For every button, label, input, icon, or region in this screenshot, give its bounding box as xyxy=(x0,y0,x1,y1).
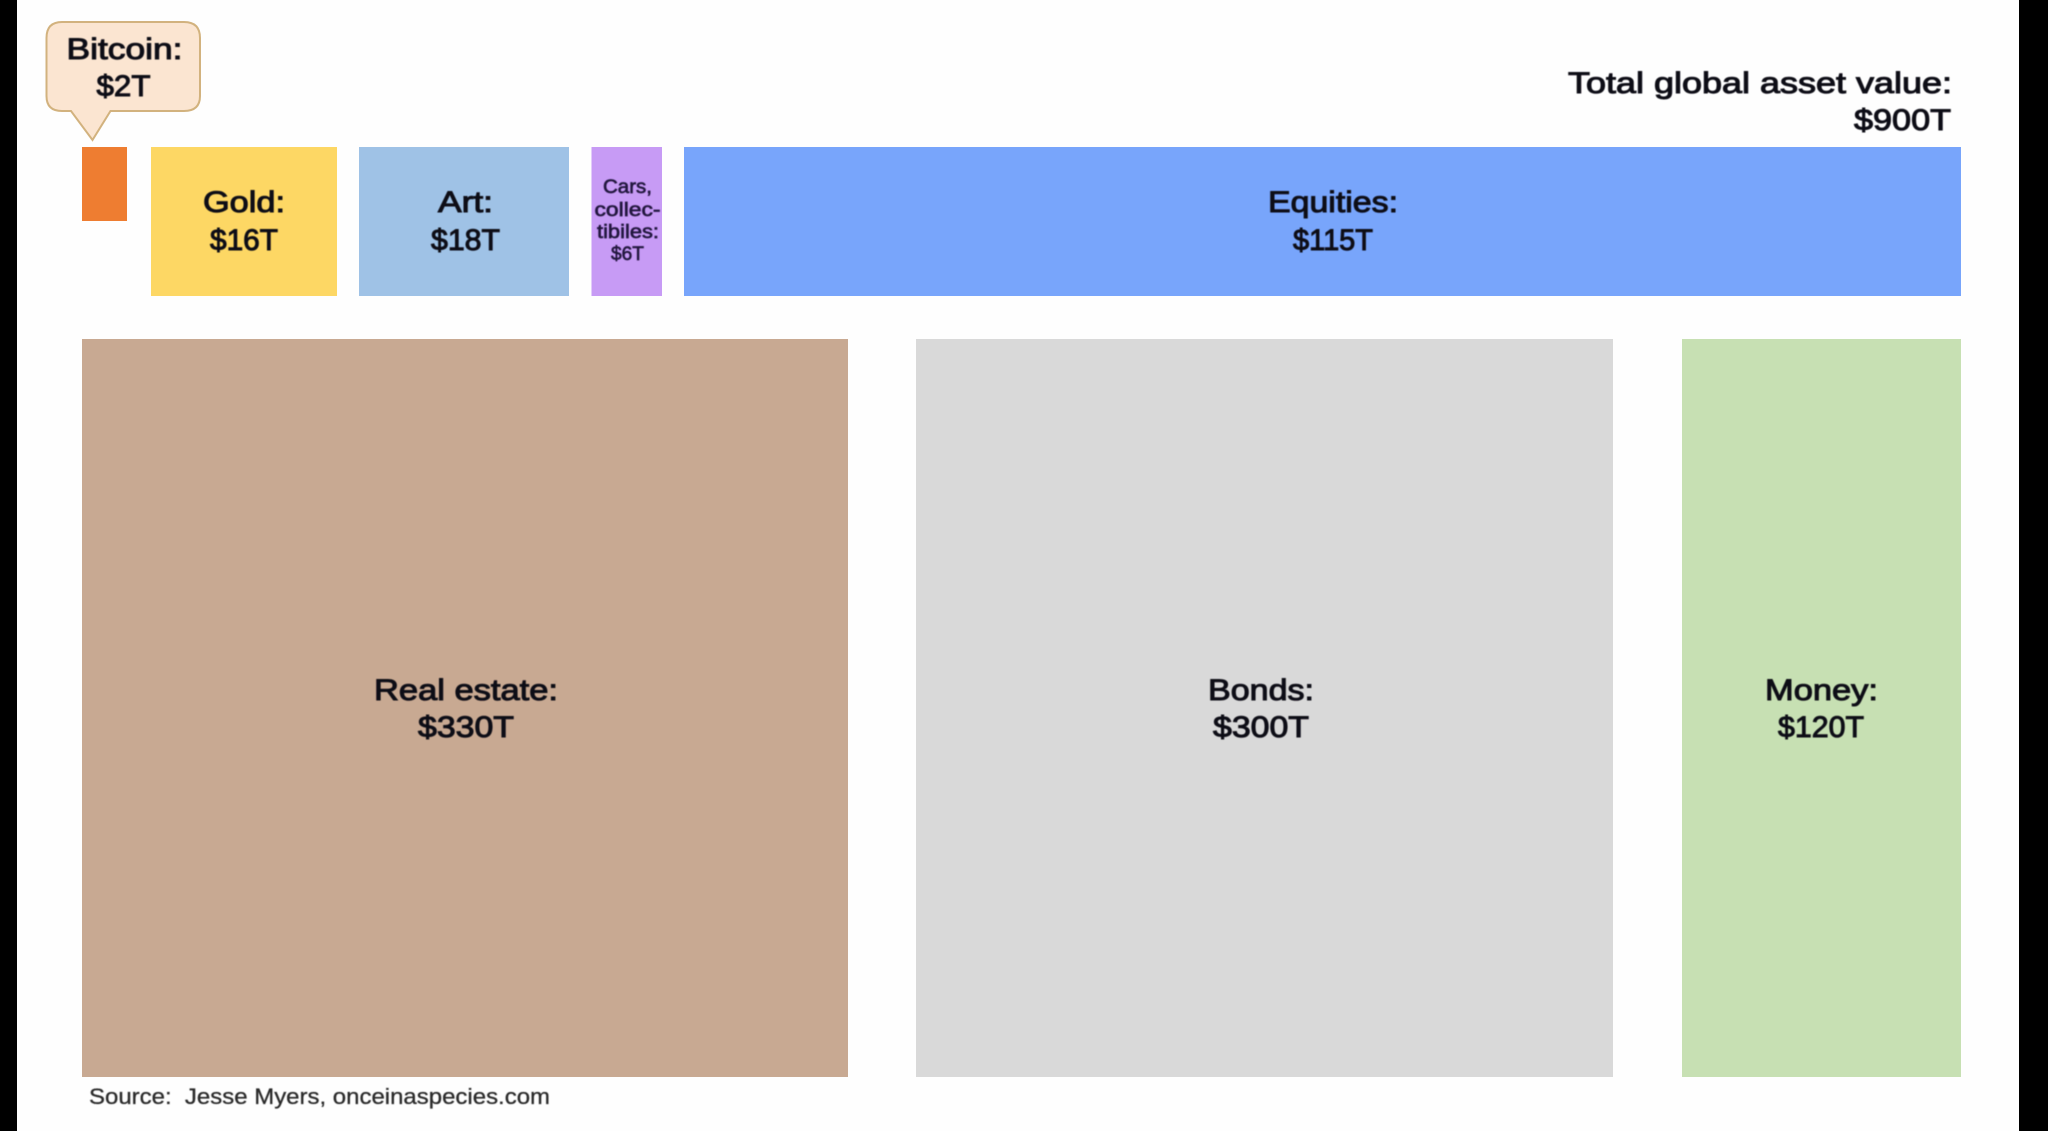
block: Money: $120T xyxy=(1778,711,1864,744)
block: Money: Money: xyxy=(1765,674,1878,707)
callout: Bitcoin $2T xyxy=(46,22,200,140)
heading: total global asset value xyxy=(1568,67,1952,137)
callout: Bitcoin $2T: Bitcoin: xyxy=(66,33,182,66)
block: Cars, collectibles xyxy=(592,147,662,296)
block: Equities: $115T xyxy=(1293,224,1373,257)
block: Equities: Equities: xyxy=(1268,186,1398,219)
block: Art xyxy=(359,147,569,296)
block: Cars, collectibles: $6T xyxy=(611,243,644,265)
source note: Source: Jesse Myers, onceinaspecies.com xyxy=(89,1084,550,1109)
block: Gold: $16T xyxy=(210,224,278,257)
block: Real estate: $330T xyxy=(418,711,514,744)
callout: Bitcoin $2T: $2T xyxy=(96,70,150,103)
block: Art: Art: xyxy=(438,186,493,219)
block: Cars, collectibles: tibiles: xyxy=(597,221,659,243)
block: Bonds: $300T xyxy=(1213,711,1309,744)
block: Money xyxy=(1682,339,1961,1077)
block: Equities xyxy=(684,147,1961,296)
block: Real estate xyxy=(82,339,848,1077)
block: Bonds xyxy=(916,339,1613,1077)
block: Bonds: Bonds: xyxy=(1208,674,1314,707)
block: Real estate: Real estate: xyxy=(374,674,558,707)
block: Art: $18T xyxy=(431,224,500,257)
block: Gold xyxy=(151,147,337,296)
heading: total global asset value: $900T xyxy=(1854,104,1951,137)
block: Cars, collectibles: collec- xyxy=(594,199,660,221)
block: Cars, collectibles: Cars, xyxy=(603,176,652,198)
block: Gold: Gold: xyxy=(203,186,285,219)
heading: total global asset value: Total global asset value: xyxy=(1568,67,1952,100)
block: Bitcoin xyxy=(82,147,127,221)
